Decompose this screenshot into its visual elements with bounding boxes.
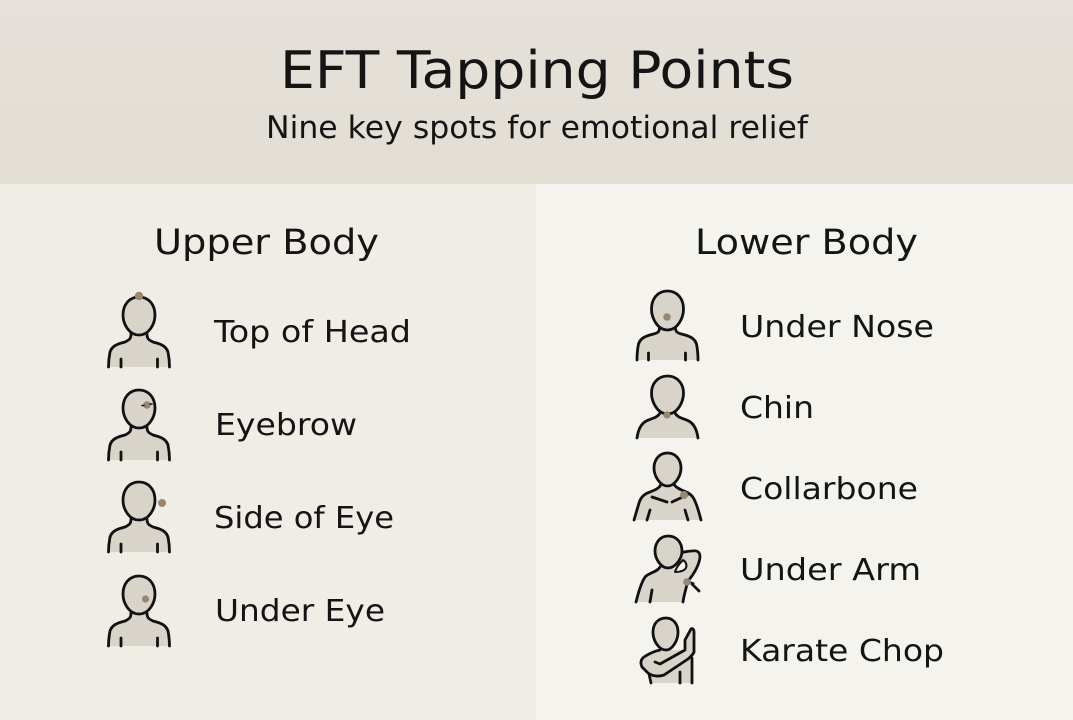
title: EFT Tapping Points: [280, 41, 794, 101]
label: side of eye: Side of Eye: [214, 501, 394, 536]
label: under nose: Under Nose: [740, 310, 934, 345]
icon: top of head: [108, 292, 170, 367]
icon: collarbone: [634, 453, 701, 520]
icon: under nose: [637, 291, 698, 360]
header band: [0, 0, 1073, 184]
icon: eyebrow: [108, 390, 170, 460]
icon: under arm: [636, 536, 700, 602]
icon: side of eye: [108, 482, 170, 552]
icon: chin: [637, 376, 698, 438]
label: eyebrow: Eyebrow: [215, 408, 357, 443]
icon: karate chop: [641, 618, 694, 683]
icon: under eye: [108, 576, 170, 646]
subtitle: Nine key spots for emotional relief: [266, 110, 809, 146]
label: under eye: Under Eye: [215, 594, 385, 629]
panel: upper body: [0, 184, 536, 720]
heading: lower body: Lower Body: [695, 223, 918, 263]
panel: lower body: [536, 184, 1073, 720]
label: karate chop: Karate Chop: [740, 634, 944, 669]
label: chin: Chin: [740, 391, 814, 426]
heading: upper body: Upper Body: [154, 223, 379, 263]
label: under arm: Under Arm: [740, 553, 921, 588]
label: collarbone: Collarbone: [740, 472, 918, 507]
label: top of head: Top of Head: [213, 315, 411, 350]
